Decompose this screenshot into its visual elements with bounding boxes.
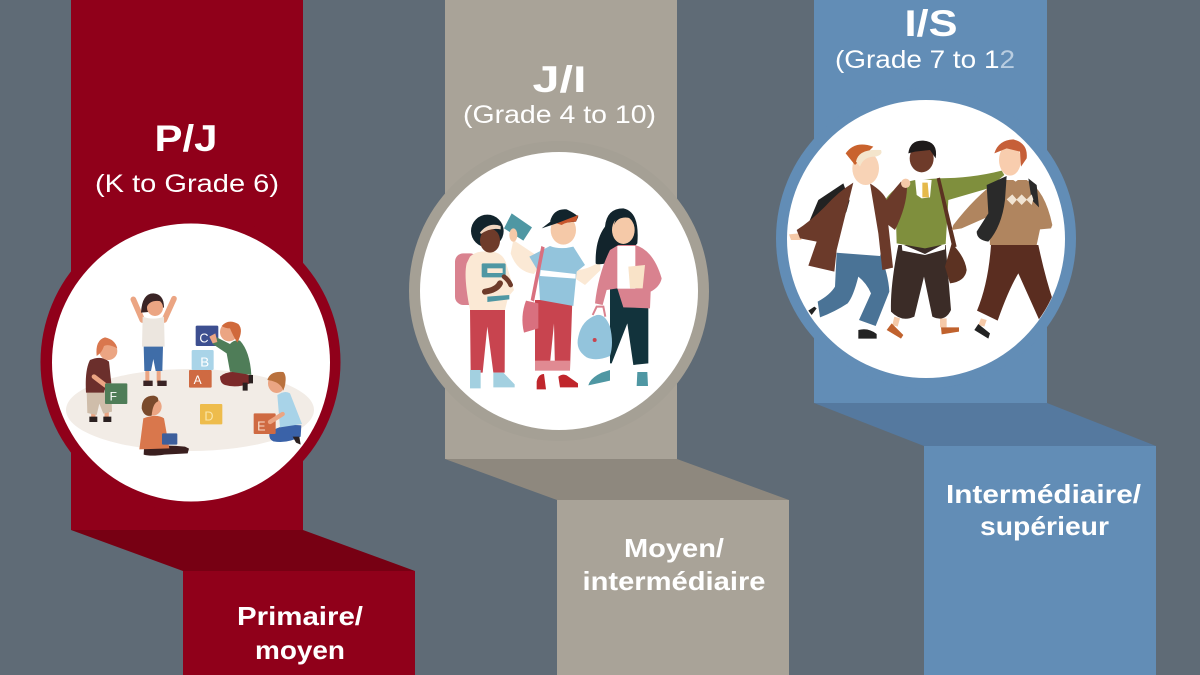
right student: [578, 208, 662, 386]
circle background: [420, 152, 698, 430]
panel: I/S intermediate-senior ribbon: [776, 0, 1156, 675]
heading: I/S: I/S: [904, 3, 958, 44]
boy holding block E: [254, 372, 302, 445]
grade range: K to Grade 6: (K to Grade 6): [95, 170, 279, 198]
blocks A B C: B: [200, 355, 209, 370]
label: Primaire/moyen: moyen: [255, 635, 345, 665]
middle student: [509, 209, 601, 389]
ribbon fold: [814, 403, 1156, 446]
label: Moyen/intermédiaire: Moyen/: [624, 533, 724, 563]
circle background: [52, 224, 330, 502]
ribbon fold: [71, 530, 415, 571]
book held up: [504, 213, 532, 241]
ribbon upper band: [71, 0, 303, 530]
ribbon upper band: [814, 0, 1047, 403]
girl with raised arms: [133, 293, 174, 386]
block F: F: [110, 389, 117, 403]
ribbon lower band: [557, 500, 789, 675]
blocks A B C: A: [194, 373, 202, 387]
panel: P/J primary-junior ribbon: [40, 0, 415, 675]
block D: [200, 404, 222, 424]
ribbon lower band: [183, 571, 415, 675]
sitting child with book: [139, 396, 189, 456]
girl holding block F: [86, 337, 117, 422]
circle ring: [409, 141, 709, 441]
circle background: [787, 100, 1065, 378]
ribbon upper band: [445, 0, 677, 459]
left teen: [789, 144, 910, 339]
blocks A B C: [189, 326, 218, 388]
circle ring: [40, 212, 340, 512]
grade range: Grade 7 to 12: (Grade 7 to 1 2: [835, 46, 1015, 74]
right teen: [952, 139, 1053, 339]
left student: [455, 215, 515, 388]
block D: D: [204, 410, 214, 424]
illustration: three teens walking arm in arm: [789, 139, 1053, 339]
heading: J/I: J/I: [532, 59, 586, 100]
label: Intermédiaire/supérieur: Intermédiaire/: [946, 479, 1141, 509]
circle ring: [776, 88, 1076, 388]
label: Intermédiaire/supérieur: supérieur: [980, 511, 1109, 541]
grade range: Grade 4 to 10: (Grade 4 to 10): [463, 101, 656, 129]
label: Primaire/moyen: Primaire/: [237, 601, 363, 631]
boy stacking blocks: [209, 322, 253, 391]
ribbon fold: [445, 459, 789, 500]
panel: J/I junior-intermediate ribbon: [409, 0, 789, 675]
label: Moyen/intermédiaire: intermédiaire: [582, 566, 766, 596]
ribbon lower band: [924, 446, 1156, 675]
illustration: three students with books and bags: [455, 208, 662, 389]
illustration: children playing with alphabet blocks: [66, 293, 314, 456]
boy holding block E: E: [257, 420, 266, 434]
heading: P/J: P/J: [154, 118, 218, 159]
block F: [105, 383, 127, 404]
middle teen: [885, 141, 1004, 339]
blocks A B C: C: [199, 331, 209, 345]
